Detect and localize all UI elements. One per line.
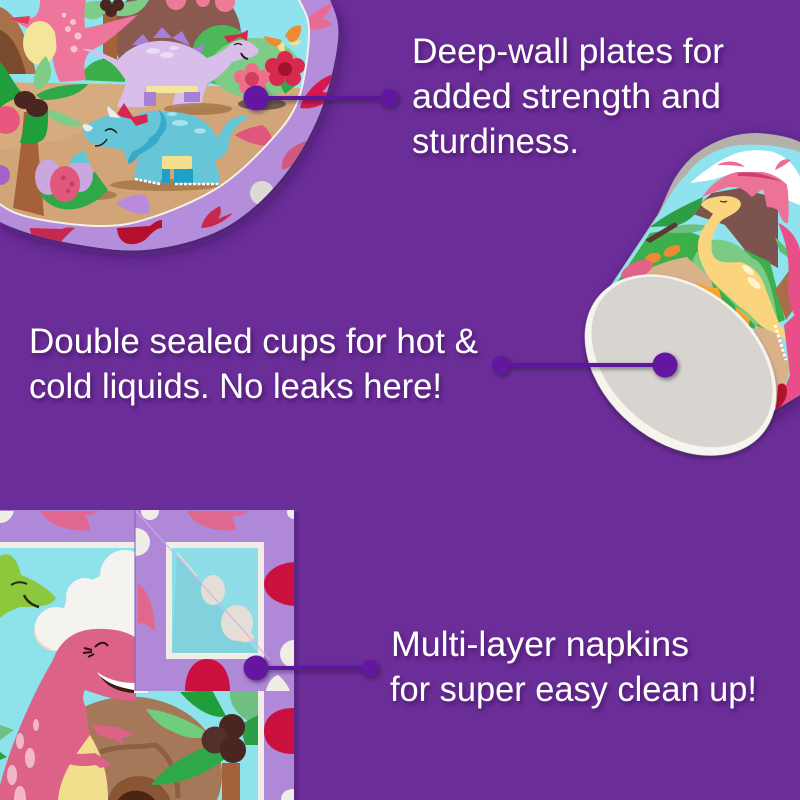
volcano	[690, 188, 778, 268]
napkin	[0, 510, 299, 800]
inner white frame	[0, 542, 264, 800]
trunk	[222, 763, 240, 800]
cave	[0, 7, 36, 74]
sky	[0, 0, 310, 92]
text: cups: Double sealed cups for hot &	[29, 322, 478, 361]
pink dinosaur	[0, 629, 136, 800]
butterfly	[645, 245, 680, 264]
text: cups: cold liquids. No leaks here!	[29, 367, 442, 406]
flap dots	[141, 502, 159, 520]
callout connector: napkin	[244, 656, 378, 680]
white fold line	[177, 553, 197, 576]
plate scene	[0, 0, 310, 230]
coconuts	[202, 714, 246, 763]
butterfly	[264, 25, 301, 51]
dinosaur: purple	[82, 27, 259, 108]
flap frame	[166, 542, 264, 659]
eggs nest	[35, 150, 108, 209]
sky	[611, 144, 800, 410]
sky	[0, 548, 258, 800]
plate ring	[0, 0, 308, 225]
light palm leaf	[146, 709, 210, 738]
text: plates: Deep-wall plates for	[412, 32, 724, 71]
palm leaves	[650, 197, 703, 227]
plate	[0, 0, 338, 251]
rim petals and dots	[30, 3, 334, 244]
text: napkins	[390, 625, 757, 709]
ground	[644, 257, 714, 288]
plate rim	[0, 0, 338, 251]
dark palm leaf	[151, 745, 232, 785]
fold shade	[172, 555, 258, 653]
flap red dome	[185, 659, 230, 691]
napkin scene	[0, 511, 294, 800]
dinosaur: pink	[8, 0, 138, 82]
fold edge shadow	[134, 510, 136, 691]
white scallops	[201, 575, 254, 642]
flap aqua	[172, 548, 258, 653]
flap base	[135, 510, 294, 691]
ground petals	[235, 125, 272, 146]
red dot	[264, 708, 294, 754]
left leaves	[0, 725, 14, 740]
flower	[621, 260, 653, 279]
shadows	[164, 103, 232, 115]
palm leaves	[180, 690, 258, 745]
palm tree	[0, 56, 88, 216]
cloud	[690, 150, 800, 205]
right palm leaf	[775, 237, 788, 258]
green bushes	[612, 228, 785, 330]
right border	[264, 690, 294, 800]
flap bottom dots	[266, 675, 290, 691]
callout connector: plate	[244, 86, 398, 110]
lava crater	[738, 172, 782, 182]
hibiscus flowers	[234, 51, 305, 110]
cup scene	[611, 144, 800, 410]
top dot	[0, 511, 14, 523]
green dinosaur	[0, 554, 56, 618]
hills	[192, 25, 244, 85]
cup	[582, 131, 800, 460]
cup base	[549, 237, 800, 493]
brown hill	[38, 697, 222, 800]
text: napkins: Multi-layer napkins	[391, 625, 689, 664]
dinosaur: yellow	[696, 196, 786, 341]
palm trunk	[645, 222, 678, 243]
cup rim shadow side	[603, 133, 800, 440]
volcano	[117, 0, 241, 84]
tooth tip	[135, 676, 148, 693]
napkin base	[0, 510, 294, 800]
text: plates: added strength and	[412, 77, 721, 116]
top palm	[84, 0, 149, 20]
flap fold edge	[135, 510, 270, 660]
cup base inner	[558, 242, 800, 482]
text: cups	[29, 322, 478, 406]
text: napkins: for super easy clean up!	[390, 670, 757, 709]
flap red dot	[264, 562, 330, 606]
left flower	[0, 106, 20, 134]
top border petal	[40, 511, 100, 530]
bottom white dot	[281, 789, 294, 800]
ground	[0, 82, 310, 230]
left purple petal	[0, 165, 10, 185]
flap petal	[187, 511, 248, 530]
right side pieces	[775, 270, 792, 320]
napkin right shadow	[294, 512, 299, 800]
napkin flap	[122, 502, 330, 691]
flap pink mark	[138, 583, 155, 632]
lava	[702, 172, 789, 223]
cloud pink marks	[717, 159, 791, 170]
text: plates: sturdiness.	[412, 122, 579, 161]
dinosaur: blue	[82, 103, 250, 184]
cloud	[34, 550, 150, 651]
light green bush	[692, 240, 778, 325]
text: plates	[412, 32, 724, 161]
callout connector: cup	[492, 352, 678, 378]
